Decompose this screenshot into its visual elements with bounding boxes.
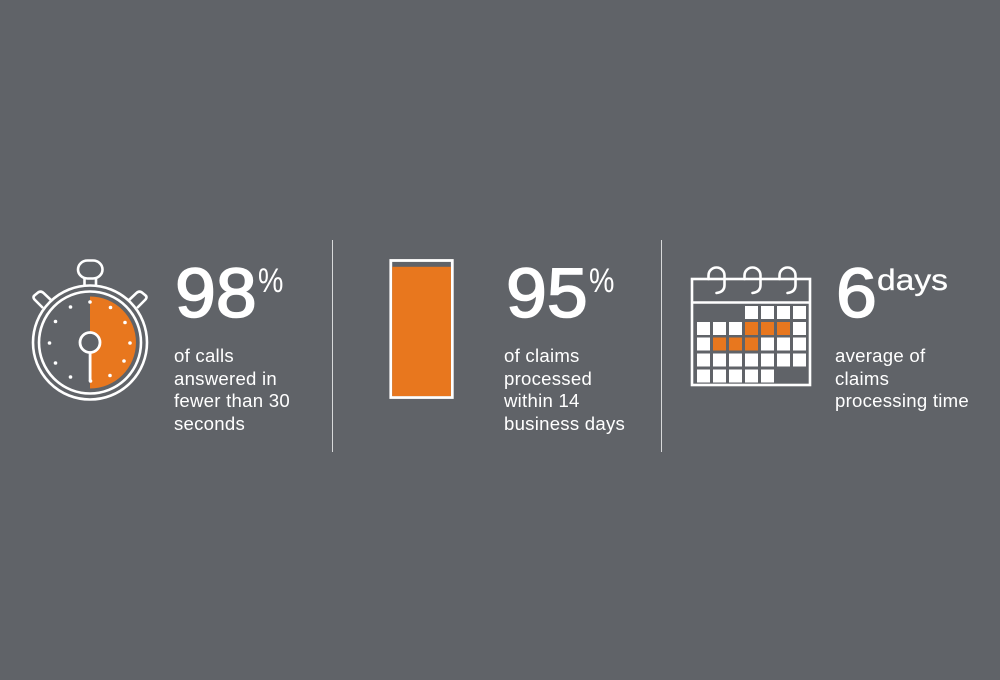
unit: days: days [876, 264, 947, 297]
text: processing time: processing time [835, 390, 969, 411]
icon: stopwatch [32, 259, 148, 401]
text: claims processed [504, 345, 625, 434]
stat: 95 percent: 95 [506, 254, 588, 332]
text: calls answered [174, 345, 290, 434]
text: claims processed: processed [504, 368, 592, 389]
text: calls answered: seconds [174, 413, 245, 434]
text: claims processed: business days [504, 413, 625, 434]
text: processing time [835, 345, 969, 411]
unit: percent sign: % [258, 262, 283, 300]
text: claims processed: of claims [504, 345, 580, 366]
text: calls answered: fewer than 30 [174, 390, 290, 411]
text: processing time: average of [835, 345, 925, 366]
text: calls answered: answered in [174, 368, 277, 389]
unit: percent sign: % [588, 262, 614, 300]
icon: calendar [690, 266, 812, 386]
stat: 98 percent: 98 [175, 254, 257, 332]
text: processing time: claims [835, 368, 889, 389]
icon: 95 percent bar [389, 259, 454, 399]
stat: 6 days: 6 [836, 254, 877, 332]
text: calls answered: of calls [174, 345, 234, 366]
text: claims processed: within 14 [504, 390, 580, 411]
